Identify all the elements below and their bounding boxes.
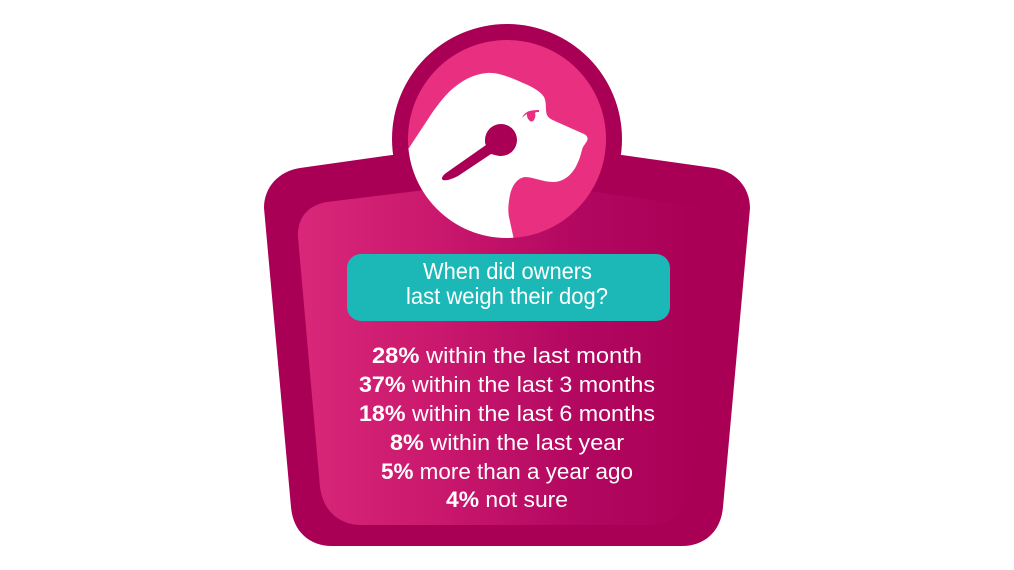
title: last weigh their dog? <box>406 283 608 309</box>
title: When did owners <box>423 258 592 284</box>
text block: survey results: 37% within the last 3 months <box>359 372 655 397</box>
badge: outer panel <box>264 24 750 546</box>
title box <box>347 254 670 321</box>
text block: survey results: 5% more than a year ago <box>381 459 633 484</box>
text block: survey results: 28% within the last month <box>372 343 642 368</box>
text block: survey results: 18% within the last 6 months <box>359 401 655 426</box>
icon: dog with ear scale <box>408 40 606 238</box>
icon: ear dial <box>442 124 517 180</box>
text block: survey results: 4% not sure <box>446 487 568 512</box>
text block: survey results <box>359 343 655 512</box>
text block: survey results: 8% within the last year <box>390 430 625 455</box>
icon: eye <box>522 110 539 122</box>
panel: inner gradient <box>298 180 716 525</box>
